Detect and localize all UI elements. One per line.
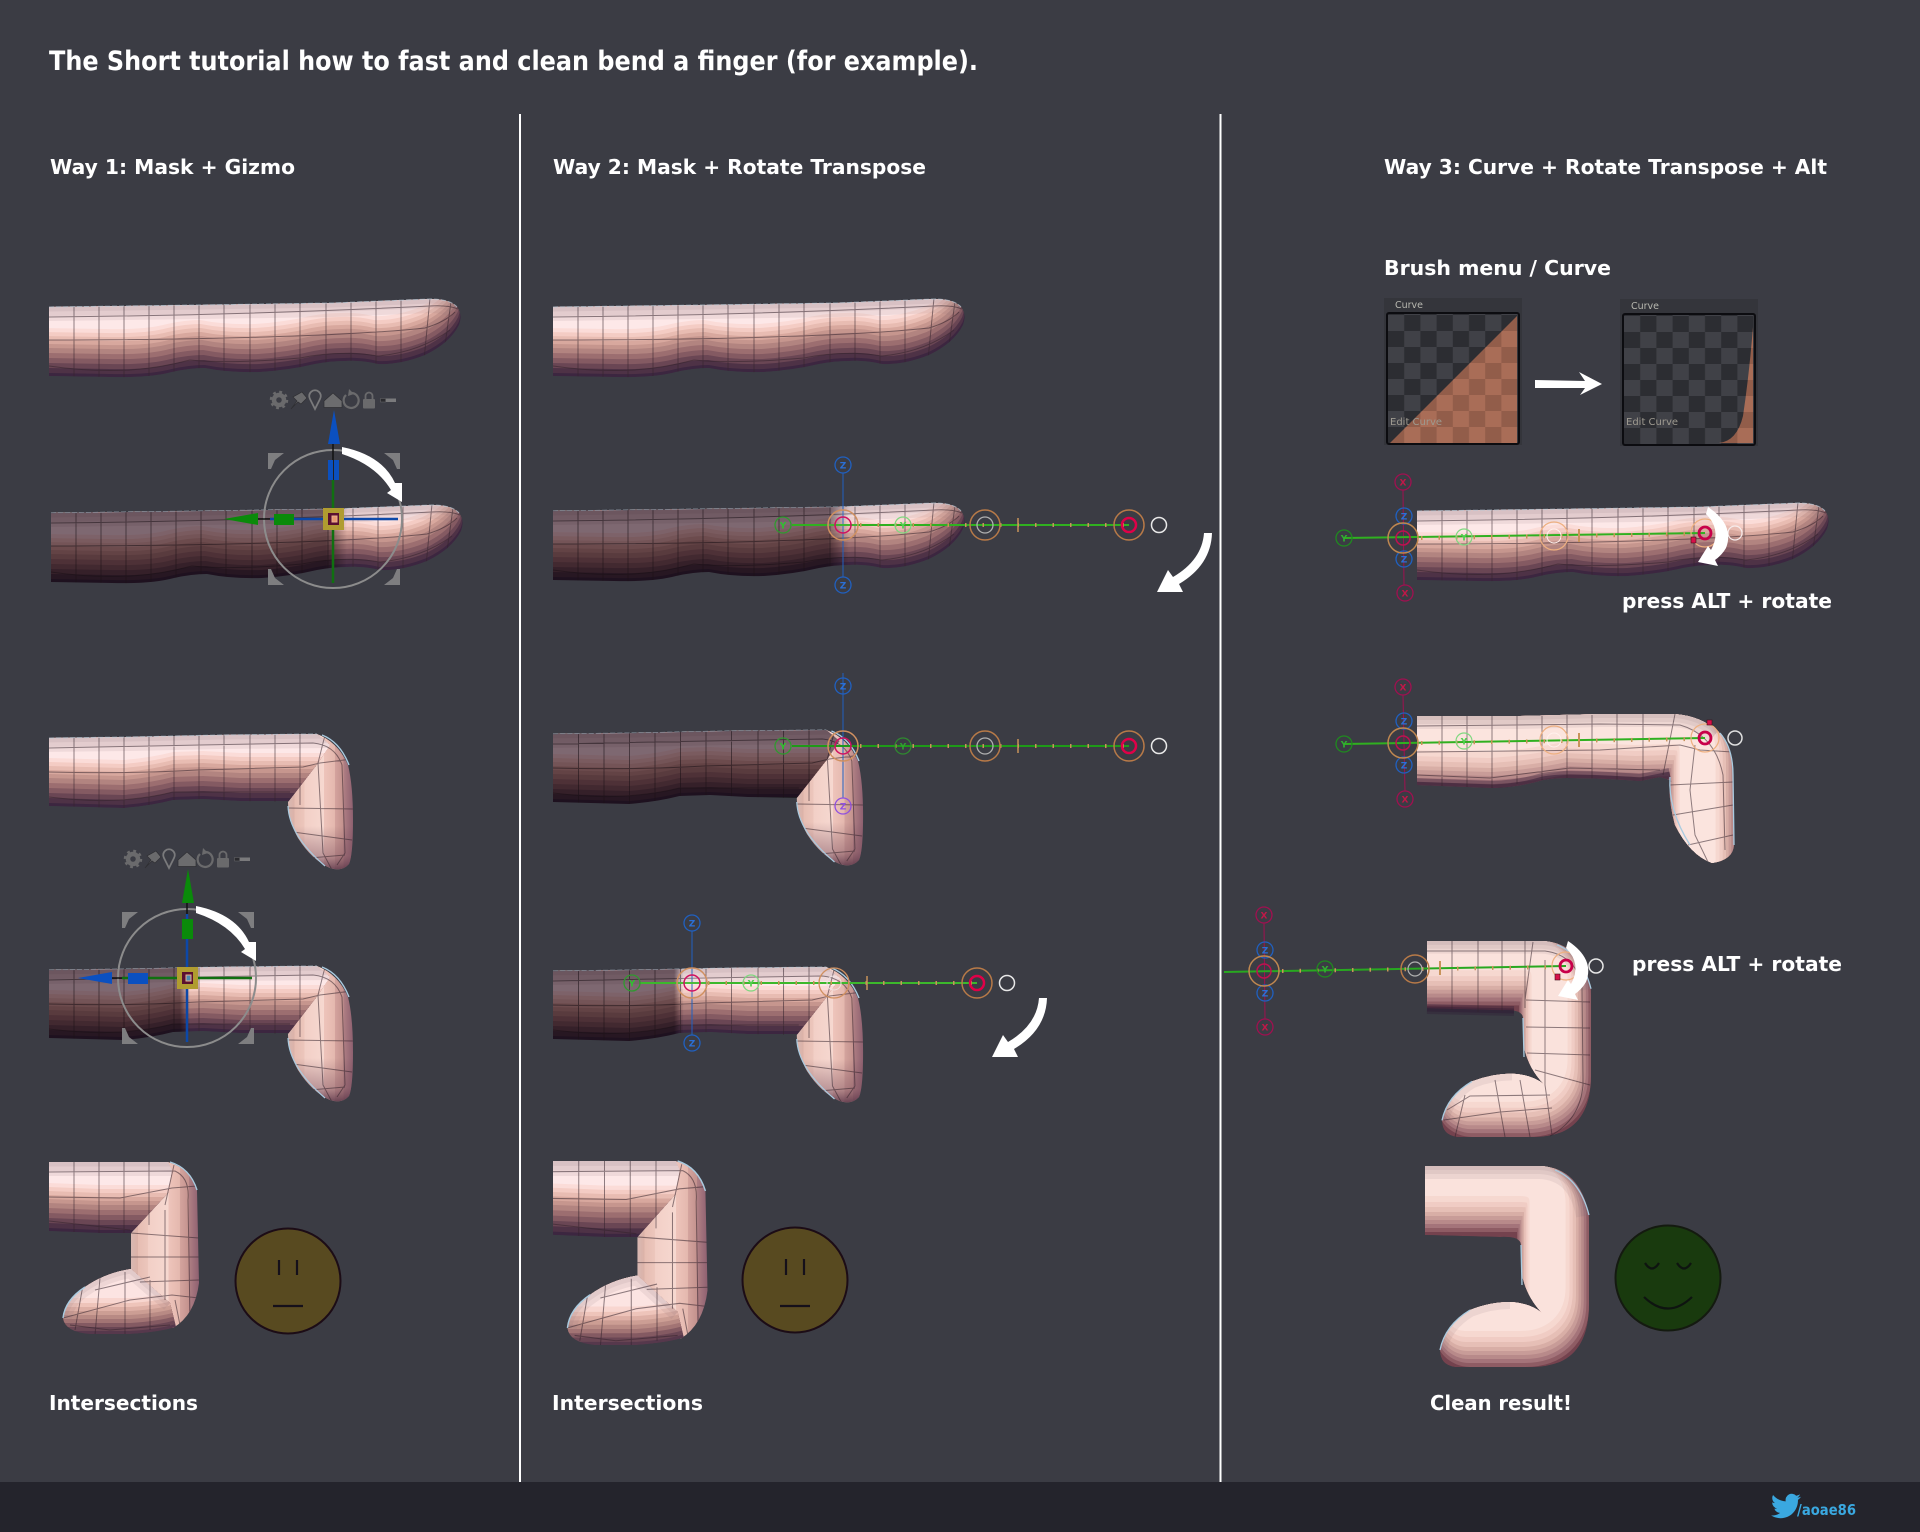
rotate transpose A: X xyxy=(1400,478,1407,488)
finger: bent xyxy=(40,552,400,870)
icon: twitter bird xyxy=(1771,1494,1801,1518)
finger: masked xyxy=(553,502,964,582)
rotate transpose B: Z xyxy=(1401,718,1408,728)
finger: fully bent xyxy=(1397,941,1591,1137)
finger: folded with intersections xyxy=(40,1002,250,1335)
rotate transpose C: X xyxy=(1262,1024,1269,1034)
column dividers xyxy=(520,114,1220,1482)
rotate gizmo 1 xyxy=(224,389,402,588)
rotate transpose line 2: Y xyxy=(779,742,787,752)
rotate transpose B: X xyxy=(1402,796,1409,806)
rotate transpose A xyxy=(1336,474,1742,601)
rotate transpose A: X xyxy=(1402,590,1409,600)
rotate transpose line 3: Y xyxy=(747,980,755,990)
rotate transpose line 3: Z xyxy=(689,920,696,930)
label: press alt rotate: press ALT + rotate xyxy=(1632,952,1842,976)
label: intersections: Intersections xyxy=(49,1391,198,1415)
finger: masked with gizmo xyxy=(51,504,462,584)
subheading: brush menu: Brush menu / Curve xyxy=(1384,256,1611,280)
rotate transpose C: Z xyxy=(1262,990,1269,1000)
rotate transpose line 3 xyxy=(624,915,1014,1051)
footer bar xyxy=(0,1482,1920,1532)
rotate transpose line 1: Y xyxy=(779,522,787,532)
rotate transpose A: Z xyxy=(1401,556,1408,566)
rotate transpose C: Z xyxy=(1262,946,1269,956)
finger: straight xyxy=(548,251,965,380)
rotate transpose B: X xyxy=(1400,684,1407,694)
rotate transpose B: Y xyxy=(1340,740,1348,750)
finger: base masked xyxy=(553,966,864,1102)
rotate transpose line 2: Z xyxy=(840,682,847,692)
rotate transpose B xyxy=(1336,679,1742,807)
twitter handle: /aoae86 xyxy=(1797,1501,1856,1519)
finger: folded with intersections xyxy=(544,990,760,1346)
rotate transpose C xyxy=(1224,907,1603,1035)
arrow: rotation direction xyxy=(1157,533,1212,592)
label: clean result: Clean result! xyxy=(1430,1391,1572,1415)
heading: way 1: Way 1: Mask + Gizmo xyxy=(50,155,295,179)
rotate transpose B: Y xyxy=(1460,738,1468,748)
finger: tip rotated under xyxy=(553,730,864,866)
curve panel: steep xyxy=(1620,299,1758,446)
rotate transpose line 1: Z xyxy=(840,462,847,472)
heading: way 2: Way 2: Mask + Rotate Transpose xyxy=(553,155,926,179)
rotate transpose B: Z xyxy=(1401,762,1408,772)
panel: way 3 xyxy=(1224,155,1842,1415)
label: press alt rotate: press ALT + rotate xyxy=(1622,589,1832,613)
finger: bent at the tip xyxy=(1417,714,1735,863)
label: intersections: Intersections xyxy=(552,1391,703,1415)
rotate transpose line 1 xyxy=(775,457,1166,593)
rotate transpose line 3: Z xyxy=(689,1040,696,1050)
finger: straight with transpose xyxy=(1412,455,1829,584)
finger: bent, base masked xyxy=(49,966,353,1102)
title: The Short tutorial how to fast and clean bend a finger (for example). xyxy=(49,46,978,77)
curve panel: steep: Curve xyxy=(1631,301,1659,312)
rotate transpose A: Y xyxy=(1460,534,1468,544)
rotate transpose line 1: Z xyxy=(840,582,847,592)
panel: way 2 xyxy=(544,155,1212,1415)
arrow: rotation direction xyxy=(992,998,1047,1057)
rotate gizmo 2 xyxy=(78,848,256,1047)
rotate transpose C: Y xyxy=(1321,966,1329,976)
icon: happy face xyxy=(1616,1226,1720,1330)
heading: way 3: Way 3: Curve + Rotate Transpose + Alt xyxy=(1384,155,1827,179)
curve panel: linear: Edit Curve xyxy=(1390,417,1442,428)
rotate transpose line 2 xyxy=(775,673,1166,814)
rotate transpose line 3: Y xyxy=(628,980,636,990)
curve panel: linear: Curve xyxy=(1395,300,1423,311)
curve panel: linear xyxy=(1384,298,1522,445)
panel: way 1 xyxy=(40,155,463,1415)
rotate transpose A: Y xyxy=(1340,534,1348,544)
arrow: curve change xyxy=(1535,372,1602,395)
rotate transpose line 2: Z xyxy=(840,802,847,812)
icon: neutral face xyxy=(742,1228,848,1332)
rotate transpose C: X xyxy=(1261,912,1268,922)
finger: clean result xyxy=(1395,1166,1589,1367)
finger: straight xyxy=(44,251,461,380)
icon: neutral face xyxy=(236,1228,340,1334)
curve panel: steep: Edit Curve xyxy=(1626,417,1678,428)
rotate transpose line 2: Y xyxy=(899,742,907,752)
rotate transpose line 1: Y xyxy=(899,522,907,532)
rotate transpose A: Z xyxy=(1401,512,1408,522)
